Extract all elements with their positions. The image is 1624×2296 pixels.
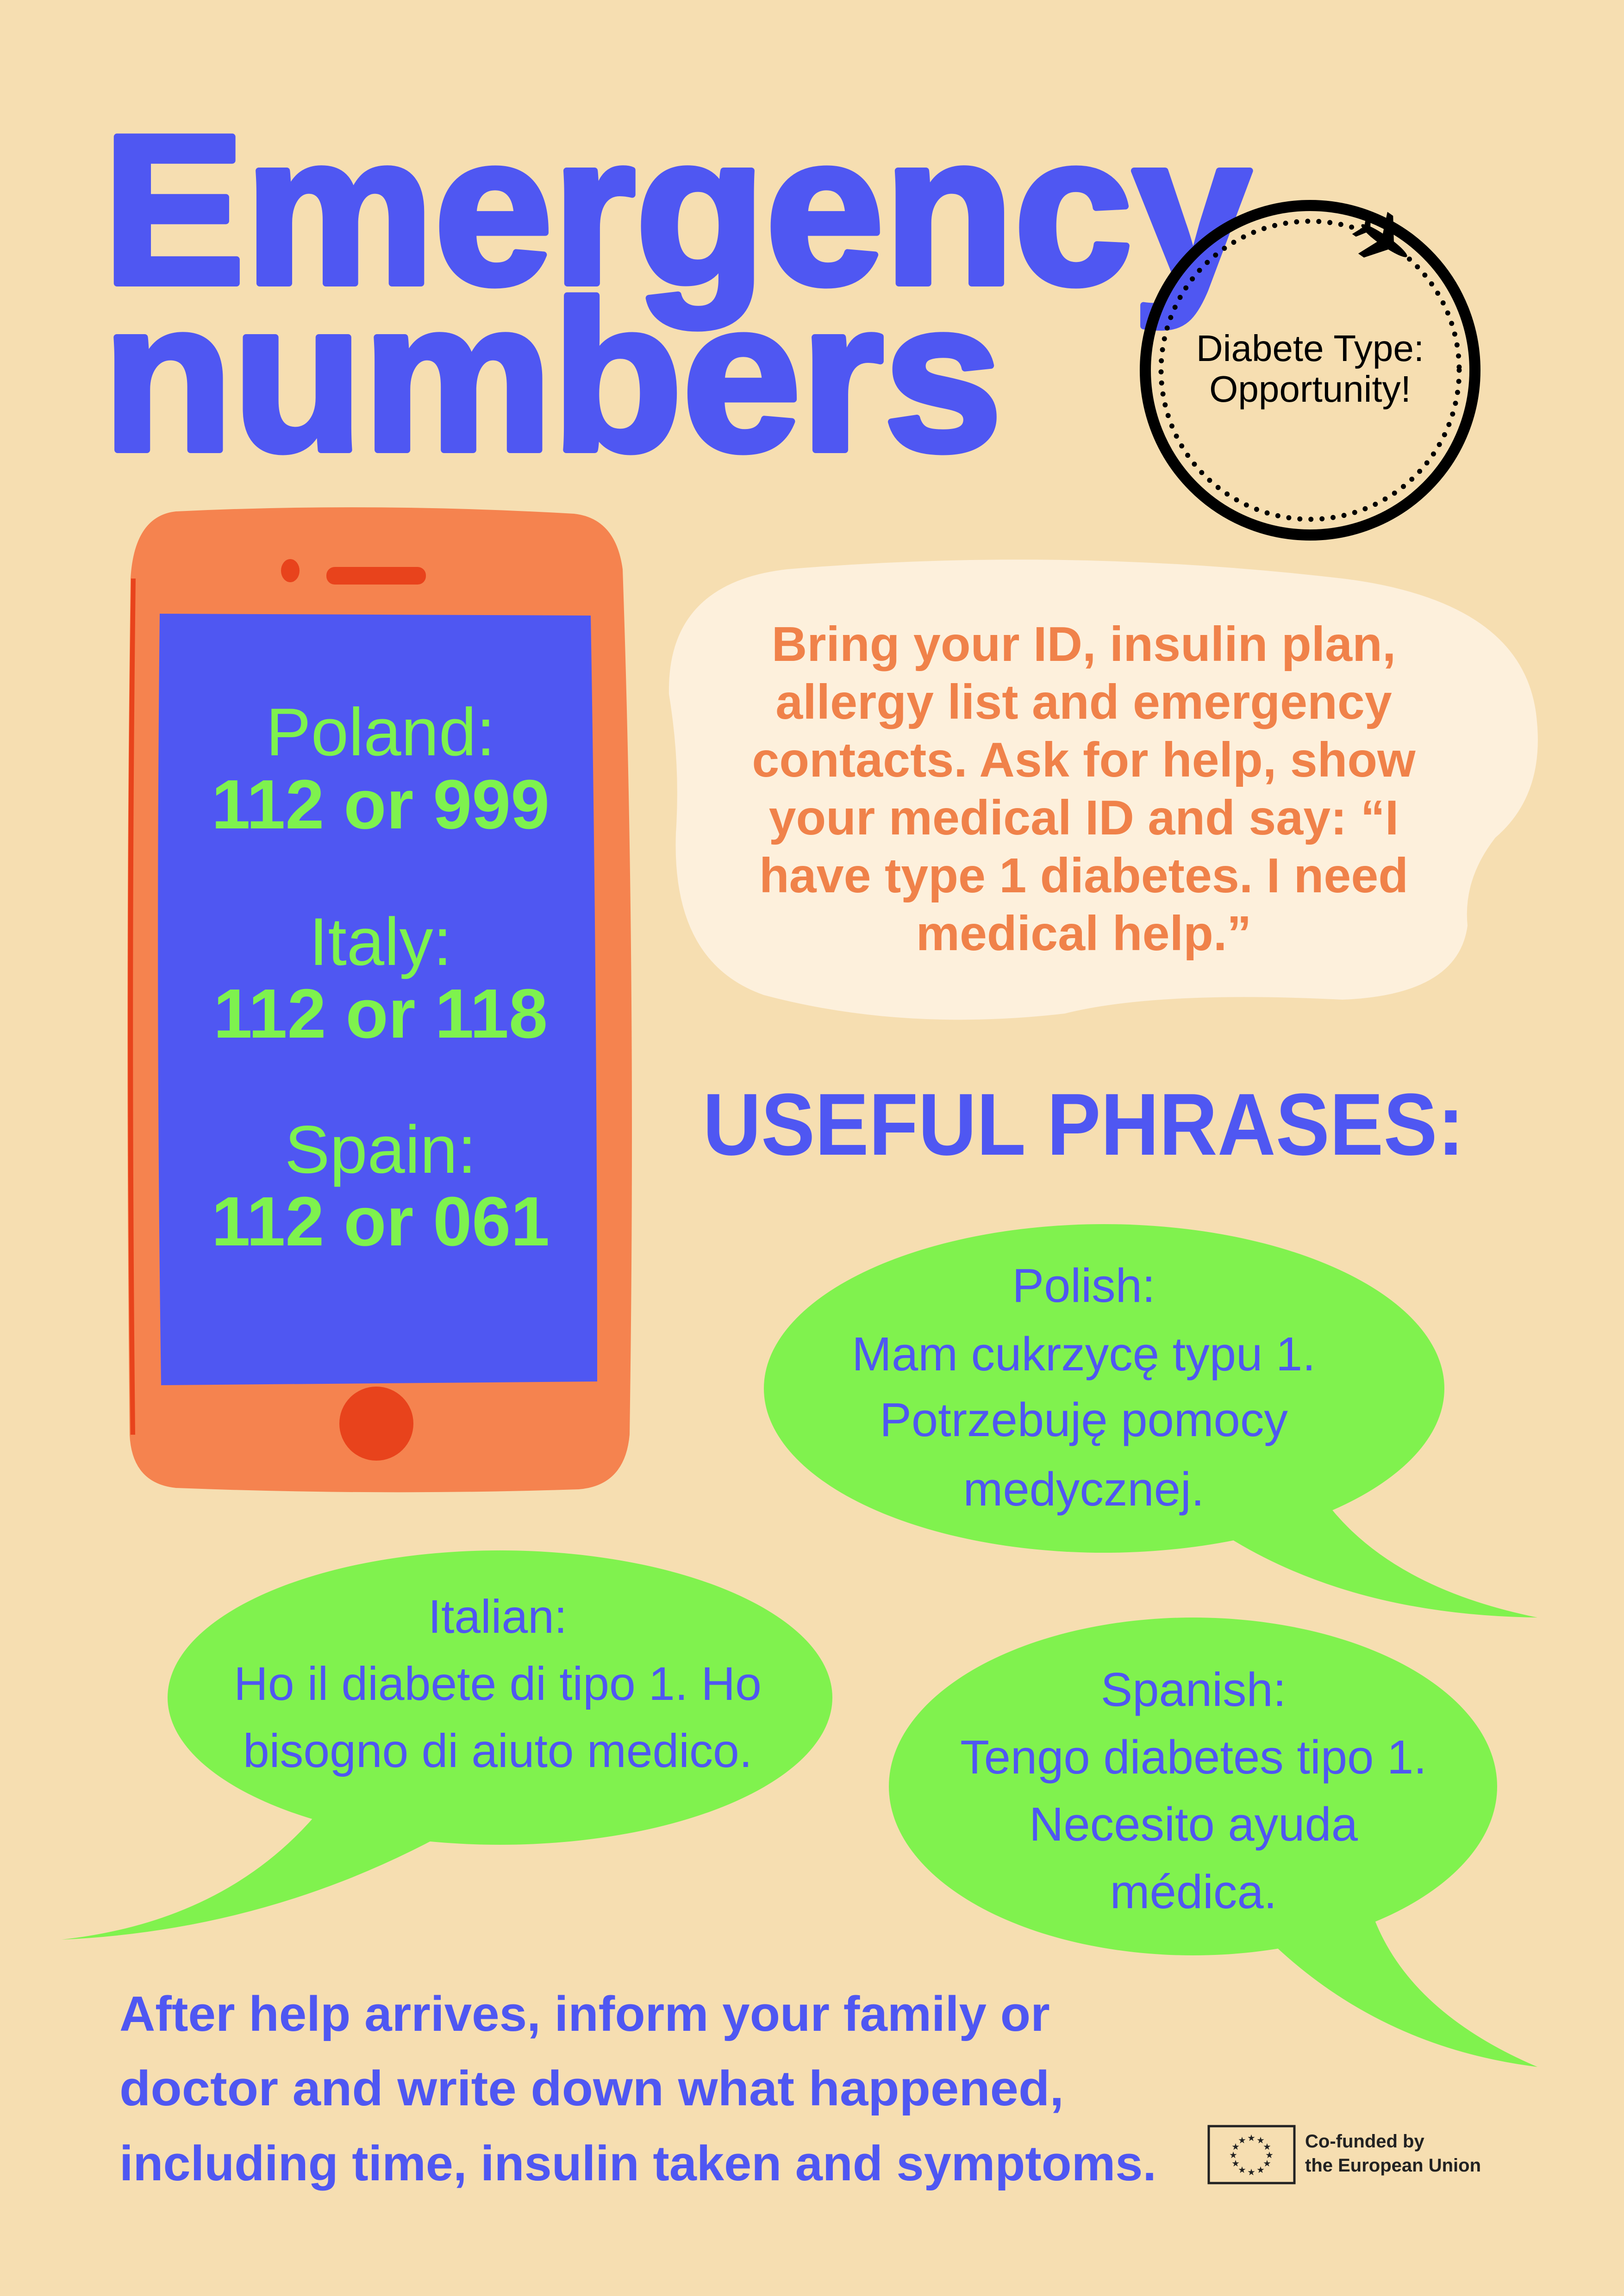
callout: bring your ID [669,560,1538,1020]
bubble: Italian: Italian: [428,1590,567,1643]
bubble: Spanish: Tengo diabetes tipo 1. [960,1730,1427,1784]
callout: bring your ID: Bring your ID, insulin plan, [772,617,1396,672]
logo: EU co-funded: the European Union [1305,2155,1481,2176]
bubble: Spanish [889,1618,1537,2067]
emergency numbers list: Poland: [266,694,495,770]
bubble: Polish: Polish: [1012,1259,1156,1312]
emergency numbers list: Spain: [285,1112,476,1187]
logo: EU co-funded: ★ [1263,2143,1271,2151]
icon: speaker [326,567,426,585]
bubble: Polish: Mam cukrzycę typu 1. [852,1327,1316,1381]
bubble: Polish [764,1224,1537,1618]
logo: EU co-funded: ★ [1257,2137,1264,2145]
logo: EU co-funded: ★ [1238,2137,1246,2145]
bottom text: doctor and write down what happened, [119,2060,1064,2116]
logo: EU co-funded: ★ [1257,2166,1264,2174]
stamp: Diabete Type Opportunity [1145,203,1475,535]
logo: EU co-funded: ★ [1238,2166,1246,2174]
logo: EU co-funded: ★ [1263,2160,1271,2168]
callout: bring your ID: contacts. Ask for help, show [752,733,1416,787]
bubble: Spanish: médica. [1110,1865,1277,1918]
logo: EU co-funded: ★ [1230,2152,1237,2159]
logo: EU co-funded: ★ [1248,2134,1255,2142]
emergency numbers list [212,694,550,1260]
logo: EU co-funded: ★ [1232,2160,1239,2168]
title: Emergency [103,91,1252,330]
title: numbers [103,258,1002,495]
phone [127,507,632,1492]
bubble: Spanish: Necesito ayuda [1029,1798,1358,1851]
icon: camera dot [281,559,300,582]
phone screen [158,614,597,1385]
callout: bring your ID: have type 1 diabetes. I need [759,848,1408,903]
callout: bring your ID: allergy list and emergency [775,675,1392,729]
logo: EU co-funded: ★ [1232,2143,1239,2151]
bubble: Italian: Ho il diabete di tipo 1. Ho [234,1657,762,1710]
icon: home button [339,1387,413,1461]
bottom text: including time, insulin taken and symptoms. [119,2135,1156,2191]
emergency numbers list: 112 or 061 [212,1182,550,1260]
bottom text [119,1986,1156,2191]
stamp: Diabete Type Opportunity: Diabete Type: [1196,328,1424,369]
icon: plane [1345,203,1422,277]
bubble: Polish: Potrzebuję pomocy [880,1393,1288,1446]
bubble: Italian: bisogno di aiuto medico. [243,1724,752,1777]
bottom text: After help arrives, inform your family or [119,1986,1050,2041]
logo: EU co-funded: ★ [1248,2169,1255,2177]
title [103,91,1252,495]
emergency numbers list: 112 or 118 [213,974,548,1052]
bubble: Spanish: Spanish: [1101,1663,1286,1716]
logo: EU co-funded: Co-funded by [1305,2131,1424,2152]
logo: EU co-funded: ★ [1266,2152,1273,2159]
callout: bring your ID: your medical ID and say: “I [769,790,1399,845]
heading: useful phrases: USEFUL PHRASES: [703,1076,1464,1174]
emergency numbers list: Italy: [309,904,452,979]
bubble: Polish: medycznej. [963,1462,1204,1516]
logo: EU co-funded [1209,2126,1481,2183]
callout: bring your ID: medical help.” [916,906,1251,961]
emergency numbers list: 112 or 999 [212,765,550,843]
bubble: Italian [62,1550,832,1940]
stamp: Diabete Type Opportunity: Opportunity! [1209,368,1411,410]
